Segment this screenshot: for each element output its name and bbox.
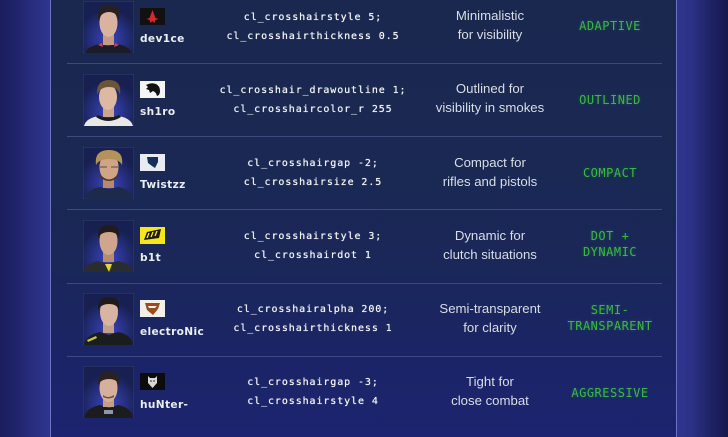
- style tag: semi-transparent: TRANSPARENT: [568, 318, 652, 332]
- team logo: Astralis: [140, 8, 165, 25]
- style tag: compact: COMPACT: [583, 166, 637, 180]
- crosshair commands: Twistzz: cl_crosshairgap -2;: [247, 158, 379, 169]
- description: electroNic: for clarity: [463, 320, 517, 335]
- description: Twistzz: rifles and pistols: [443, 174, 537, 189]
- crosshair commands: huNter-: [247, 377, 379, 407]
- style tag: semi-transparent: [568, 303, 652, 332]
- style tag: adaptive: ADAPTIVE: [579, 19, 641, 33]
- crosshair commands: Twistzz: cl_crosshairsize 2.5: [244, 176, 382, 188]
- description: sh1ro: [436, 81, 544, 115]
- description: b1t: clutch situations: [443, 247, 537, 262]
- description: sh1ro: Outlined for: [456, 81, 524, 96]
- crosshair commands: dev1ce: cl_crosshairstyle 5;: [244, 12, 382, 23]
- player name: electroNic: electroNic: [140, 326, 204, 338]
- player avatar: huNter-: [83, 366, 134, 418]
- player avatar: b1t: [83, 220, 134, 272]
- crosshair commands: electroNic: cl_crosshairalpha 200;: [237, 304, 389, 315]
- player avatar: sh1ro: [83, 74, 134, 126]
- description: dev1ce: for visibility: [458, 27, 522, 42]
- crosshair commands: b1t: cl_crosshairdot 1: [254, 250, 372, 260]
- description: huNter-: close combat: [451, 393, 529, 408]
- style tag: outlined: OUTLINED: [579, 93, 641, 107]
- team logo: Virtus.pro: [140, 300, 165, 317]
- style tag: dot + dynamic: DYNAMIC: [583, 244, 637, 258]
- player name: Twistzz: Twistzz: [140, 179, 186, 191]
- description: huNter-: Tight for: [466, 374, 514, 389]
- player avatar: dev1ce: [83, 1, 134, 53]
- crosshair commands: b1t: cl_crosshairstyle 3;: [244, 231, 382, 242]
- style tag: aggressive: AGGRESSIVE: [571, 386, 649, 400]
- description: sh1ro: visibility in smokes: [436, 100, 544, 115]
- team logo: Team Liquid: [140, 154, 165, 171]
- crosshair commands: electroNic: cl_crosshairthickness 1: [233, 322, 393, 334]
- team logo: G2: [140, 373, 165, 390]
- style tag: semi-transparent: SEMI-: [591, 303, 629, 317]
- description: b1t: [443, 228, 537, 262]
- crosshair commands: dev1ce: cl_crosshairthickness 0.5: [226, 30, 400, 42]
- crosshair commands: huNter-: cl_crosshairstyle 4: [247, 396, 379, 406]
- crosshair commands: b1t: [244, 231, 382, 261]
- description: dev1ce: Minimalistic: [456, 8, 524, 23]
- description: b1t: Dynamic for: [455, 228, 525, 243]
- crosshair commands: sh1ro: cl_crosshaircolor_r 255: [233, 104, 393, 114]
- crosshair commands: dev1ce: [226, 12, 400, 42]
- crosshair commands: sh1ro: [220, 85, 406, 115]
- team logo: Spirit: [140, 81, 165, 98]
- crosshair commands: Twistzz: [244, 158, 382, 188]
- team logo: Natus Vincere: [140, 227, 165, 244]
- player avatar: Twistzz: [83, 147, 134, 199]
- crosshair commands: huNter-: cl_crosshairgap -3;: [247, 377, 379, 388]
- style tag: dot + dynamic: DOT +: [591, 229, 629, 243]
- style tag: dot + dynamic: [582, 229, 637, 258]
- crosshair commands: electroNic: [233, 304, 393, 334]
- player avatar: electroNic: [83, 293, 134, 345]
- description: Twistzz: [443, 155, 537, 189]
- player name: b1t: b1t: [140, 252, 161, 264]
- description: Twistzz: Compact for: [454, 155, 526, 170]
- crosshair commands: sh1ro: cl_crosshair_drawoutline 1;: [220, 85, 406, 96]
- description: huNter-: [451, 374, 529, 408]
- description: electroNic: Semi-transparent: [439, 301, 541, 316]
- description: dev1ce: [456, 8, 524, 42]
- description: electroNic: [439, 301, 541, 335]
- player name: dev1ce: dev1ce: [140, 33, 185, 45]
- player name: huNter-: huNter-: [140, 399, 188, 411]
- player name: sh1ro: sh1ro: [140, 106, 175, 118]
